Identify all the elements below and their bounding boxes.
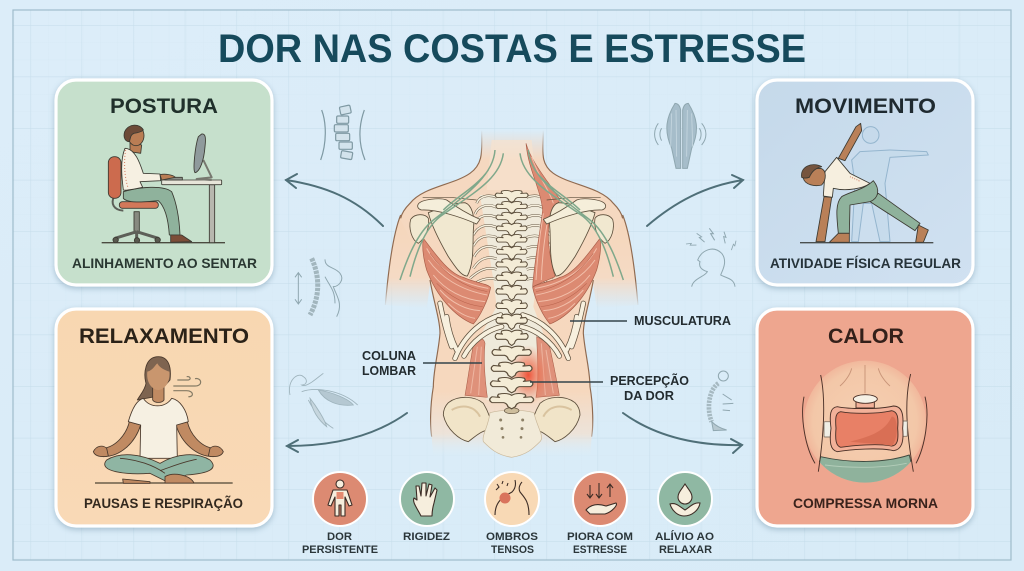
faint icon: curved spine and head xyxy=(709,371,733,431)
label xyxy=(302,531,378,556)
label: PIORA COM xyxy=(567,531,633,543)
caption: atividade física regular: ATIVIDADE FÍSICA REGULAR xyxy=(770,255,961,271)
symptom: alívio ao relaxar xyxy=(655,472,714,556)
arrow: to postura xyxy=(286,174,383,226)
faint icon: tense muscle xyxy=(655,103,706,168)
label: RIGIDEZ xyxy=(403,531,450,543)
symptom: piora com estresse xyxy=(567,472,633,556)
label: coluna lombar xyxy=(362,349,416,378)
caption: alinhamento ao sentar: ALINHAMENTO AO SENTAR xyxy=(72,256,257,271)
spine xyxy=(490,190,534,409)
heading: relaxamento: RELAXAMENTO xyxy=(79,325,249,348)
icon: meditating woman xyxy=(93,357,233,483)
torso silhouette xyxy=(401,130,623,458)
label: RELAXAR xyxy=(659,544,712,556)
panel: movimento xyxy=(757,80,973,285)
rib cage backdrop xyxy=(480,195,543,400)
label: ESTRESSE xyxy=(573,544,627,556)
label: percepção da dor: PERCEPÇÃO xyxy=(610,373,689,388)
label: percepção da dor: DA DOR xyxy=(624,389,674,403)
symptom: rigidez xyxy=(400,472,454,543)
arrow: to movimento xyxy=(647,175,743,226)
faint icon: spine posture xyxy=(295,258,342,317)
heading: calor: CALOR xyxy=(828,325,904,348)
panel: postura xyxy=(56,80,272,285)
icon: body with pain xyxy=(328,480,352,516)
panel: relaxamento xyxy=(56,309,272,526)
label: coluna lombar: COLUNA xyxy=(362,349,416,363)
symptom: dor persistente xyxy=(302,472,378,556)
faint icon: shoulder muscles xyxy=(289,373,358,428)
symptom: ombros tensos xyxy=(485,472,539,556)
pelvis xyxy=(443,397,580,457)
title: DOR NAS COSTAS E ESTRESSE xyxy=(218,27,806,71)
icon: arrows over hand xyxy=(586,483,616,514)
label: DOR xyxy=(327,531,352,543)
callout lines xyxy=(423,321,627,382)
right scapula and shoulder muscles xyxy=(520,150,623,324)
right trapezius muscle xyxy=(526,143,560,287)
panel: central back anatomy illustration xyxy=(385,130,638,458)
lumbar muscles xyxy=(465,337,559,397)
icon: warm compress on lower back xyxy=(803,361,927,487)
label: TENSOS xyxy=(491,544,534,556)
left scapula and shoulder muscles xyxy=(400,150,503,324)
icon: person stretching xyxy=(800,123,933,243)
icon: person seated at desk xyxy=(102,125,225,243)
label xyxy=(655,530,714,556)
neck and trapezius tint xyxy=(487,140,537,190)
faint icon: stress head xyxy=(686,228,739,287)
label: ALÍVIO AO xyxy=(655,530,714,543)
caption: pausas e respiração: PAUSAS E RESPIRAÇÃO xyxy=(84,494,243,511)
label xyxy=(486,531,538,556)
torso outline xyxy=(401,130,623,437)
arms xyxy=(385,215,638,308)
upper ribs xyxy=(470,196,553,283)
label: percepção da dor xyxy=(610,373,689,403)
heading: movimento: MOVIMENTO xyxy=(795,95,936,118)
lower ribs xyxy=(440,303,583,358)
panel: calor xyxy=(757,309,973,526)
label: OMBROS xyxy=(486,531,538,543)
label xyxy=(567,531,633,556)
caption: compressa morna: COMPRESSA MORNA xyxy=(793,496,938,511)
label: PERSISTENTE xyxy=(302,544,378,556)
icon: hand xyxy=(414,483,437,516)
heading: postura: POSTURA xyxy=(110,95,218,118)
faint icon: spine segment xyxy=(321,105,365,160)
arrow: to calor xyxy=(623,413,742,453)
label: musculatura: MUSCULATURA xyxy=(634,314,731,328)
pain glow xyxy=(508,345,549,405)
icon: droplet over hand xyxy=(670,484,700,516)
arrow: to relaxamento xyxy=(287,413,407,452)
icon: tense shoulder xyxy=(495,480,529,515)
label: coluna lombar: LOMBAR xyxy=(362,364,416,378)
